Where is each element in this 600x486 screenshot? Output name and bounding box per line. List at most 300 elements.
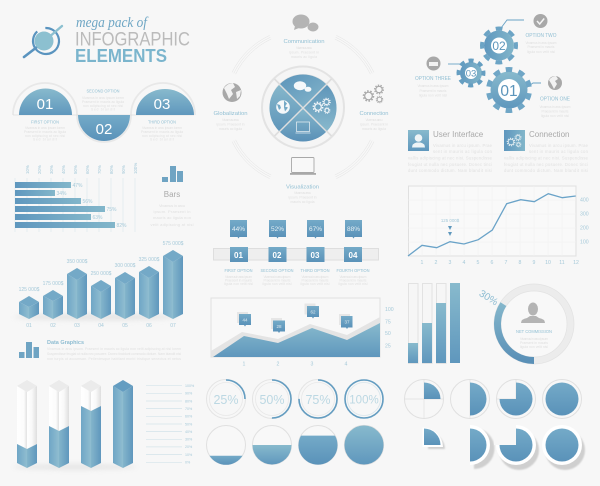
second option label: SECOND OPTION [260, 268, 294, 273]
panel: user interface: User Interface [433, 130, 484, 139]
title: INFOGRAPHIC [75, 29, 190, 51]
horizontal bar chart [15, 163, 138, 232]
percentage scale: 70% [185, 407, 193, 411]
third option text: Sed blandit [150, 138, 174, 142]
first option text: Sed blandit [33, 138, 57, 142]
third option label [300, 268, 330, 286]
connector lines [448, 20, 541, 88]
axis labels: 60% [85, 165, 90, 174]
title [75, 15, 190, 66]
month axis [421, 260, 579, 266]
bar 03: 03 [74, 323, 80, 329]
vertical progress bars [408, 283, 460, 364]
first option label: Vivamus in arcu ipsum [225, 275, 252, 279]
step 03 [306, 247, 324, 262]
second option text: SECOND OPTION [86, 88, 120, 94]
step 02 [268, 247, 286, 262]
gauge 25% [206, 426, 246, 465]
data graphics caption: Vivamus in arcu ipsum. Praesent in mauris ac ligula non velit adipiscing at nisl lorem [47, 347, 181, 351]
bar 02: 175 000$ [43, 281, 64, 287]
value axis: 300 [580, 212, 589, 218]
node: globalization: mauris ac ligula [219, 127, 242, 131]
icon: gears [364, 85, 383, 103]
data graphics caption [19, 340, 181, 361]
option three: OPTION THREE [415, 76, 452, 82]
axis labels: 70% [97, 165, 102, 174]
panel: connection: dunt commodo dictum. Nam blandit nisi [504, 168, 588, 173]
gears [415, 14, 571, 118]
value axis [580, 198, 589, 246]
option 02 segment [78, 115, 130, 141]
second option label [260, 268, 294, 286]
third option label: Praesent in mauris [302, 278, 329, 282]
percentage scale: 30% [185, 438, 193, 442]
pie 25% [404, 380, 444, 418]
radial diagram [214, 14, 388, 204]
panel: user interface [408, 130, 493, 173]
percent tag 67: 67% [309, 226, 322, 233]
axis labels [25, 163, 138, 174]
centre ring [262, 66, 344, 148]
tall isometric bars [13, 380, 137, 470]
bar 05: 05 [122, 323, 128, 329]
month axis: 5 [477, 260, 480, 266]
option one: ligula non velit nisl [541, 114, 569, 118]
icon: small bars [162, 166, 183, 182]
bars caption: ipsum. Praesent in [154, 209, 190, 214]
percentage scale [146, 384, 195, 465]
bar 04: 04 [98, 323, 104, 329]
bar 07 [163, 241, 184, 329]
third option label: THIRD OPTION [300, 268, 330, 273]
node: visualization: Visualization [286, 184, 319, 190]
fourth option label [336, 268, 370, 286]
data tag 62 [304, 304, 319, 318]
category axis [243, 362, 348, 368]
second option text: Sed blandit [91, 108, 115, 112]
icon: gears [313, 98, 330, 113]
slider track [214, 248, 378, 260]
panel: user interface: feugiat ut nulla nec posuere. Donec tinci [408, 162, 492, 167]
percentage scale: 0% [185, 461, 191, 465]
wave outline [13, 83, 195, 142]
tube 1 [408, 284, 418, 364]
value axis: 400 [580, 198, 589, 204]
tube 2 [422, 284, 432, 364]
line chart [408, 186, 589, 266]
node: connection: ipsum. Praesent in [360, 122, 388, 126]
node: connection [360, 85, 388, 131]
axis labels: 80% [109, 165, 114, 174]
second option text: Vivamus in arcu ipsum lorem [82, 96, 124, 100]
outer arcs [232, 35, 374, 179]
month axis: 7 [505, 260, 508, 266]
option three [415, 56, 452, 98]
chart frame [408, 186, 576, 256]
gray area [211, 317, 380, 357]
gauge ring [494, 284, 574, 364]
node: visualization [286, 158, 319, 204]
option one: Vivamus in arcu ipsum [540, 105, 571, 109]
bar values [56, 183, 127, 229]
value axis [385, 307, 394, 350]
bar 07: 07 [170, 323, 176, 329]
pie 50% [450, 380, 490, 418]
node: communication [284, 14, 324, 59]
tube 3 [436, 284, 446, 364]
pie 100% [542, 380, 582, 418]
bars caption: velit adipiscing at nisl [150, 222, 194, 227]
bar 06 [139, 257, 160, 329]
bar 01: 125 000$ [19, 287, 40, 293]
axis labels: 20% [37, 165, 42, 174]
value axis: 200 [580, 226, 589, 232]
option two: OPTION TWO [526, 33, 557, 39]
quadrant: bottom [280, 109, 326, 142]
month axis: 3 [449, 260, 452, 266]
bar 05 [115, 263, 136, 329]
icon: folder [426, 56, 440, 70]
gauge 100% [344, 425, 384, 465]
category axis: 4 [345, 362, 348, 368]
data tag 44 [237, 312, 251, 326]
percent tag 52 [269, 220, 286, 238]
option three: ligula non velit nisl [419, 94, 447, 98]
fill gauges [206, 425, 384, 465]
panel: connection: vallis adipiscing at nec nisi. Suspendisse [504, 156, 589, 160]
month axis: 6 [491, 260, 494, 266]
percent tag 67 [307, 220, 324, 238]
step 01 [230, 247, 248, 262]
ring 100% [345, 380, 383, 418]
bar 01: 01 [26, 323, 32, 329]
option 01 segment: 01 [37, 96, 53, 113]
bars caption: Bars [164, 190, 180, 199]
fourth option label: FOURTH OPTION [336, 268, 370, 273]
node: globalization: Vivamus arcu [222, 118, 239, 122]
gear 01 [486, 67, 532, 113]
second option label: Praesent in mauris [264, 278, 291, 282]
panel: connection [504, 130, 589, 173]
bar 07: 575 000$ [163, 241, 184, 247]
icon: globe [276, 100, 290, 114]
callout: 125 000$ [441, 218, 460, 223]
commission text: ligula non velit nisl [520, 345, 548, 349]
node: globalization: Globalization [214, 111, 248, 117]
first option text: FIRST OPTION [31, 120, 59, 124]
pie row [404, 380, 582, 418]
bar values: 75% [106, 207, 117, 213]
pie 75% [496, 380, 536, 418]
gear 03 [456, 58, 486, 88]
bar 02 [43, 281, 64, 329]
first option text [24, 120, 66, 142]
value axis: 50 [385, 331, 391, 337]
bar 05: 300 000$ [115, 263, 136, 269]
commission text [516, 329, 552, 349]
month axis: 9 [533, 260, 536, 266]
bar 02: 02 [50, 323, 56, 329]
option 03 segment [136, 89, 194, 115]
quadrant: left [269, 85, 302, 131]
node: visualization: Vivamus arcu [294, 191, 311, 195]
third option text: Praesent in mauris ac ligula [141, 130, 183, 134]
data tag 44: 44 [242, 318, 248, 322]
ring 75%: 75% [305, 393, 331, 407]
month axis: 11 [559, 260, 565, 266]
ring 25%: 25% [213, 393, 239, 407]
third option text: Vivamus in arcu ipsum lorem [142, 126, 182, 130]
quadrant: top [280, 74, 326, 107]
baseline [13, 114, 194, 116]
option one: OPTION ONE [540, 96, 571, 102]
percent tag 44 [230, 220, 247, 238]
option two [526, 14, 557, 54]
bar 03 [67, 259, 88, 329]
net commission gauge [477, 284, 574, 364]
axis labels: 50% [73, 165, 78, 174]
ring 25% [206, 380, 246, 418]
option one: Praesent in mauris [542, 110, 569, 114]
bar 03: 350 000$ [67, 259, 88, 265]
bars [15, 182, 115, 228]
title: ELEMENTS [75, 45, 167, 66]
data graphics caption: Suspendisse feugiat ut nulla nec posuere. Donec tincidunt commodo dictum. Nam blandit nisi [47, 352, 181, 356]
ring 75% [298, 380, 338, 418]
wave options [13, 83, 195, 142]
data line [408, 194, 576, 256]
node: connection: Vivamus arcu [366, 118, 383, 122]
second option text [82, 88, 124, 112]
commission text: Praesent in mauris [520, 341, 548, 345]
data tag 37 [339, 314, 352, 329]
node: connection: mauris ac ligula [362, 127, 386, 131]
blue area [213, 323, 380, 357]
tube 4 [450, 283, 460, 363]
bar values: 82% [116, 223, 127, 229]
tall bar 1 [17, 380, 37, 468]
chart frame [211, 298, 380, 357]
option three: Vivamus in arcu ipsum [418, 84, 449, 88]
value axis: 75 [385, 320, 391, 326]
data tag 37: 37 [344, 320, 350, 324]
percentage scale: 40% [185, 430, 193, 434]
third option text [141, 120, 183, 142]
first option label [224, 268, 253, 286]
icon: user [408, 130, 429, 151]
third option text: THIRD OPTION [148, 120, 176, 124]
first option text: Praesent in mauris ac ligula [24, 130, 66, 134]
node: visualization: ipsum. Praesent in [288, 196, 317, 200]
option two: Vivamus in arcu ipsum [526, 41, 557, 45]
gear 02 [479, 26, 519, 65]
bar 01 [19, 287, 40, 329]
node: communication: Communication [284, 39, 324, 45]
tall bar 2 [49, 380, 69, 468]
quadrant: right [304, 85, 337, 131]
third option text: non adipiscing at nec nisi [142, 134, 182, 138]
percentage scale: 90% [185, 392, 193, 396]
percentage scale: 50% [185, 422, 193, 426]
ring 100%: 100% [349, 394, 379, 406]
second option text: Praesent in mauris ac ligula [82, 100, 124, 104]
month axis: 4 [463, 260, 466, 266]
panel: connection: sent in mauris ac ligula con [529, 149, 589, 154]
icon: laptop [290, 158, 316, 175]
bars caption: mauris ac ligula non [153, 215, 191, 220]
month axis: 2 [435, 260, 438, 266]
first option text: Vivamus in arcu ipsum lorem [25, 126, 65, 130]
percentage scale: 80% [185, 399, 193, 403]
tall bar 4 [113, 380, 133, 468]
percent label: 30% [477, 288, 500, 308]
bars caption: Vivamus in arcu [159, 203, 185, 208]
axis labels: 10% [25, 165, 30, 174]
title: mega pack of [76, 15, 149, 31]
icon: speech bubbles [292, 14, 318, 32]
gauge arc [497, 304, 534, 360]
slice 100% [542, 425, 585, 470]
ring 50% [252, 380, 292, 418]
icon: globe [548, 76, 562, 90]
option 03 segment: 03 [154, 96, 170, 113]
slice 75% [494, 423, 539, 470]
icon: globe [222, 83, 242, 102]
progress rings [206, 380, 383, 418]
step 04 [344, 247, 362, 262]
data graphics caption: Data Graphics [47, 340, 84, 346]
gear 02: 02 [492, 39, 506, 53]
percent tag 88 [345, 220, 362, 238]
gear 03: 03 [466, 68, 476, 80]
bar values: 63% [92, 215, 103, 221]
month axis: 10 [545, 260, 551, 266]
area chart [211, 298, 394, 368]
bar values: 56% [82, 199, 93, 205]
axis labels: 90% [121, 165, 126, 174]
node: visualization: mauris ac ligula [290, 200, 315, 204]
category axis: 1 [243, 362, 246, 368]
percentage scale: 60% [185, 415, 193, 419]
step 01: 01 [234, 251, 243, 260]
bar 06: 06 [146, 323, 152, 329]
fourth option label: ligula non velit nisl [338, 282, 368, 286]
value axis: 100 [385, 307, 394, 313]
data tag 28: 28 [276, 324, 282, 329]
category axis: 3 [311, 362, 314, 368]
icon: laptop [296, 122, 310, 133]
commission text: Vivamus in arcu ipsum [520, 337, 548, 341]
tall bar 3 [81, 380, 101, 468]
percentage scale: 10% [185, 453, 193, 457]
icon: gears [504, 130, 525, 151]
icon: check [534, 14, 548, 28]
option 02 segment: 02 [96, 121, 112, 138]
commission text: NET COMMISSION [516, 329, 552, 334]
option slider [214, 220, 378, 286]
month axis: 1 [421, 260, 424, 266]
first option label: Praesent in mauris [225, 278, 252, 282]
axis labels: 40% [61, 165, 66, 174]
first option text: non adipiscing at nec nisi [25, 134, 65, 138]
isometric bar chart [14, 241, 184, 329]
step 04: 04 [349, 251, 358, 260]
slice 50% [470, 425, 494, 469]
node: connection: Connection [360, 111, 388, 117]
second option label: Vivamus in arcu ipsum [264, 275, 291, 279]
exploded pie row [422, 423, 585, 470]
value axis: 100 [580, 240, 589, 246]
fourth option label: Praesent in mauris [340, 278, 367, 282]
first option label: FIRST OPTION [224, 268, 252, 273]
option three: Praesent in mauris [420, 89, 447, 93]
callout [441, 218, 460, 236]
node: communication: mauris ac ligula [291, 55, 317, 59]
panel: user interface: sent in mauris ac ligula con [433, 149, 493, 154]
bar values: 47% [72, 183, 83, 189]
axis labels: 30% [49, 165, 54, 174]
bars caption [150, 166, 194, 227]
axis labels: 100% [133, 163, 138, 174]
panel: connection: Vivamus in arcu ipsum. Prae [529, 143, 589, 148]
value axis: 25 [385, 344, 391, 350]
fourth option label: Vivamus in arcu ipsum [340, 275, 367, 279]
month axis: 12 [573, 260, 579, 266]
gauge 75% [298, 426, 338, 465]
step 02: 02 [273, 251, 282, 260]
data tag 28 [271, 318, 285, 333]
month axis: 8 [519, 260, 522, 266]
percentage scale: 20% [185, 445, 193, 449]
third option label: Vivamus in arcu ipsum [302, 275, 329, 279]
option one [540, 76, 571, 118]
bar 04: 250 000$ [91, 271, 112, 277]
ring 50%: 50% [259, 393, 285, 407]
percent tag 44: 44% [232, 226, 245, 233]
second option text: non adipiscing at nec nisi [83, 104, 123, 108]
percent tag 52: 52% [271, 226, 284, 233]
percentage scale: 100% [185, 384, 195, 388]
data tag 62: 62 [310, 310, 316, 314]
panel: user interface: Vivamus in arcu ipsum. Prae [433, 143, 493, 148]
slice 25% [422, 427, 445, 449]
bar values: 34% [56, 191, 67, 197]
icon: chat [294, 81, 311, 92]
option two: Praesent in mauris [528, 45, 555, 49]
step 03: 03 [311, 251, 320, 260]
bar 06: 325 000$ [139, 257, 160, 263]
node: globalization: ipsum. Praesent in [216, 122, 245, 126]
third option label: ligula non velit nisl [300, 282, 330, 286]
logo icon: magnifier [24, 23, 64, 59]
panel: connection: feugiat ut nulla nec posuere. Donec tinci [504, 162, 588, 167]
gear 01: 01 [500, 83, 518, 100]
icon: small bars [19, 342, 39, 358]
percent tag 88: 88% [347, 226, 360, 233]
node: globalization [214, 83, 248, 131]
panel: user interface: dunt commodo dictum. Nam blandit nisi [408, 168, 492, 173]
bar 04 [91, 271, 112, 329]
option two: ligula non velit nisl [527, 50, 555, 54]
panel: user interface: vallis adipiscing at nec nisi. Suspendisse [408, 156, 493, 160]
panel: connection: Connection [529, 130, 569, 139]
data graphics caption: non turpis ut accumsan. Pellentesque habitant morbi tristique senectus et netus [47, 357, 181, 361]
node: communication: Vivamus arcu [296, 46, 312, 50]
first option label: ligula non velit nisl [224, 282, 253, 286]
gauge 50% [252, 426, 292, 464]
icon: person [521, 302, 545, 323]
category axis: 2 [277, 362, 280, 368]
